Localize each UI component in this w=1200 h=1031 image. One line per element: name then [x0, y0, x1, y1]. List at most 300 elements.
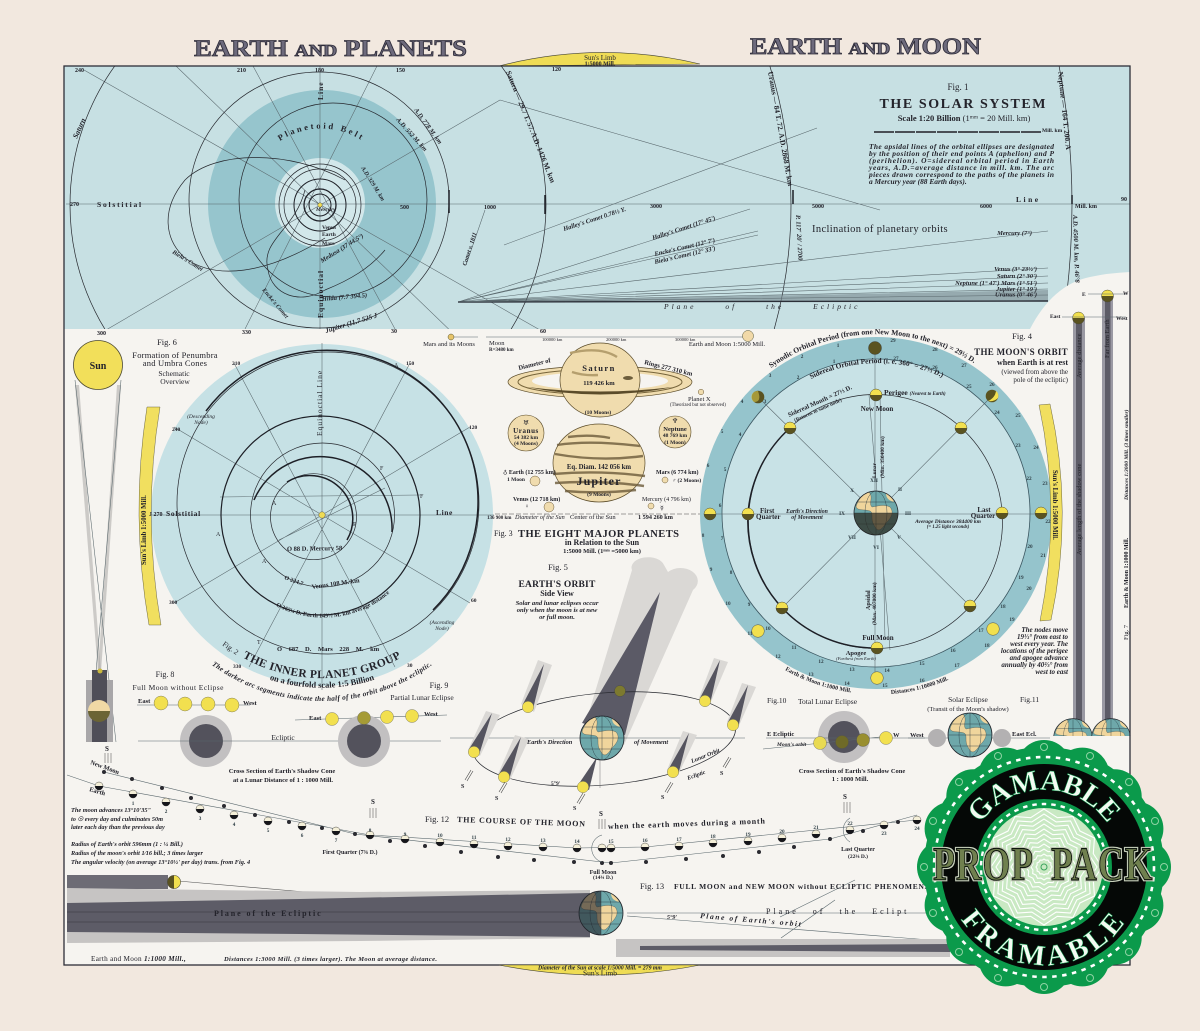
- day numbers: 22: [847, 821, 853, 827]
- heading: Earth and Planets: EARTH AND PLANETS: [194, 36, 467, 61]
- day numbers on ring: 1: [837, 343, 840, 349]
- day numbers on ring: 15: [882, 683, 888, 689]
- day numbers: [132, 801, 920, 845]
- map sheet: [64, 66, 1130, 965]
- planet: Neptune: ♆: [672, 417, 678, 425]
- day numbers: 13: [540, 838, 546, 844]
- planet and comet labels: A.D. 778 M. km: [412, 106, 443, 146]
- orbit labels: S: [573, 806, 577, 812]
- planet and comet labels: Plane of the Ecliptic: [663, 302, 860, 311]
- day numbers on ring: 25: [966, 384, 972, 390]
- labels: A: [394, 363, 399, 369]
- day numbers on ring: V: [897, 535, 901, 541]
- text block: nodes note: annually by 40⅔° from: [1001, 661, 1069, 669]
- planet and comet labels: Jupiter (1° 19'): [995, 286, 1037, 293]
- ring labels: (Max. 407000 km): [871, 582, 878, 625]
- day numbers on ring: 17: [954, 663, 960, 669]
- day numbers on ring: 5: [721, 429, 724, 435]
- panel: Fig 7 shadow columns: [1050, 290, 1130, 757]
- labels: (22⅜ D.): [848, 853, 868, 860]
- text block: moon course notes: Radius of the moon's orbit 1⁄16 bill.; 3 times larger: [70, 850, 203, 857]
- day numbers on ring: II: [898, 487, 902, 493]
- day numbers on ring: X: [850, 488, 854, 494]
- labels: S: [599, 810, 603, 818]
- caption: Fig 6: and Umbra Cones: [143, 358, 207, 368]
- day numbers on ring: 5: [724, 467, 727, 473]
- sheet frame: [64, 66, 1130, 965]
- sun centre line: 136 900 km: [487, 516, 512, 521]
- planet and comet labels: Jupiter (11.7 525 J: [323, 311, 379, 335]
- ring labels: (= 1.25 light seconds): [927, 525, 970, 530]
- day numbers: 12: [505, 837, 511, 843]
- planet: Jupiter: Jupiter: [576, 474, 622, 488]
- panel: Fig 10 total lunar eclipse: W: [893, 732, 900, 739]
- panel: Fig 9 partial lunar eclipse: West: [424, 711, 439, 718]
- planet: Neptune: (1 Moon): [664, 439, 686, 446]
- planet: Saturn: Diameter of: [518, 357, 552, 372]
- scale strip: Mars, Moon and Earth: Mars and its Moons: [423, 341, 475, 348]
- legend: the solar system title block: years, A.D.=average distance in mill. km. The arc: [868, 163, 1055, 172]
- panel: Fig 8 full moon without eclipse: Full Moon without Eclipse: [132, 683, 224, 692]
- planet and comet labels: Venus: [322, 225, 336, 231]
- day numbers on ring: XII: [870, 478, 878, 484]
- panel: Fig 7 shadow columns: East: [1050, 314, 1061, 320]
- labels: Solstitial: [166, 509, 201, 518]
- globe: [579, 891, 623, 935]
- planet: Uranus: 54 382 km: [514, 435, 538, 441]
- ring labels: Last: [977, 506, 991, 514]
- caption: Fig 6: Fig. 6: [157, 337, 177, 347]
- day numbers on ring: 2: [797, 375, 800, 381]
- planet and comet labels: Encke's Comet (12° 7'): [653, 237, 716, 258]
- legend: the solar system title block: Fig. 1: [947, 82, 969, 92]
- legend: the solar system title block: a Mercury year (88 Earth days).: [869, 177, 967, 186]
- labels: 120: [469, 425, 478, 431]
- planet: Uranus: [508, 415, 544, 451]
- ring labels: Earth's Direction: [785, 509, 828, 515]
- small planets: ♂ (2 Moons): [672, 477, 701, 484]
- sun's limb top: [499, 52, 700, 68]
- day numbers on ring: 8: [730, 570, 733, 576]
- caption: Fig 13: Fig. 13: [640, 881, 664, 891]
- planet: Neptune: [659, 416, 691, 448]
- planet: Jupiter: [553, 424, 645, 502]
- labels: A: [262, 559, 267, 565]
- text block: moon course notes: [70, 807, 250, 866]
- sun centre line: [487, 514, 710, 521]
- planet and comet labels: Neptune — 164 T. 200. A: [1056, 71, 1073, 151]
- ecliptic line with shadow cross-section caption: at a Lunar Distance of 1 : 1000 Mill.: [233, 777, 333, 784]
- day numbers on ring: 9: [748, 602, 751, 608]
- planet: Jupiter: Eq. Diam. 142 056 km: [567, 464, 631, 471]
- main shadow band: Plane of the Ecliptic: [214, 909, 323, 918]
- orbit labels: S: [720, 771, 724, 777]
- day numbers on ring: 27: [893, 356, 899, 362]
- caption: Fig 6: Formation of Penumbra: [132, 350, 218, 360]
- panel: Fig 9 partial lunar eclipse: East: [309, 715, 322, 722]
- planet and comet labels: Saturn: [71, 117, 87, 140]
- planet and comet labels: Uranus — 84 T. 72. A.D. 2868 M. km: [766, 71, 795, 188]
- day numbers on ring: 10: [765, 626, 771, 632]
- labels: Fig. 12: [425, 814, 449, 824]
- panel: Fig 9 partial lunar eclipse: Fig. 9: [430, 681, 448, 690]
- ecliptic line with shadow cross-section caption: [138, 733, 441, 784]
- planet: Uranus: Uranus: [513, 427, 539, 435]
- labels: Venus 108 M. km: [311, 577, 361, 591]
- labels: 30: [407, 663, 413, 669]
- text block: nodes note: and apogee advance: [1010, 654, 1068, 662]
- day numbers: 21: [813, 825, 819, 831]
- orbit labels: S: [661, 795, 665, 801]
- panel: Fig 10 total lunar eclipse: [763, 696, 925, 783]
- planet and comet labels: Encke's Comet: [260, 287, 289, 320]
- panel: Fig 7 shadow columns: West: [1116, 316, 1128, 322]
- caption: Fig 13: FULL MOON and NEW MOON without ECLIPTIC PHENOMENA: [674, 882, 931, 891]
- day numbers on ring: 6: [719, 503, 722, 509]
- panel: Fig 2 the inner planet group: [138, 343, 494, 702]
- caption: earth's orbit: Fig. 5: [548, 562, 568, 572]
- caption: earth's orbit: EARTH'S ORBIT: [519, 580, 596, 590]
- day numbers: 6: [301, 833, 304, 839]
- labels: O 365¼ D. Earth 149½ M. km average distance: [276, 592, 390, 618]
- panel: Fig 10 total lunar eclipse: Total Lunar Eclipse: [798, 697, 858, 706]
- day numbers on ring: 20: [1026, 586, 1032, 592]
- labels: The darker arc segments indicate the half of the orbit above the ecliptic.: [212, 662, 432, 702]
- planet and comet labels: Mercury: [315, 207, 336, 213]
- planet and comet labels: A.D. 4500 M. km, P. 46°8: [1071, 214, 1080, 284]
- planet and comet labels: A.D. 329 M. km: [359, 165, 385, 203]
- panel: Fig 4 the moon's orbit: [700, 329, 1069, 694]
- planet and comet labels: Line: [316, 81, 325, 100]
- day numbers on ring: 15: [919, 661, 925, 667]
- panel: Fig 7 shadow columns: Distances 1:3000 Mill. (3 times smaller): [1123, 409, 1130, 501]
- ring labels: (Returns to same node): [793, 396, 843, 424]
- planet and comet labels: Biela's Comet (12° 33'): [653, 245, 716, 266]
- panel: Fig 11 solar eclipse: Solar Eclipse: [948, 695, 989, 704]
- day numbers: 1: [132, 801, 135, 807]
- panel: Fig 7 shadow columns: Far from Earth: [1104, 319, 1111, 358]
- scale line: [91, 955, 437, 963]
- day numbers on ring: 25: [1015, 413, 1021, 419]
- caption: earth's orbit: or full moon.: [539, 614, 575, 621]
- text block: nodes note: locations of the perigee: [1001, 647, 1068, 655]
- title: eight major planets: THE EIGHT MAJOR PLANETS: [518, 529, 679, 540]
- planet: Saturn: Saturn: [582, 363, 616, 373]
- degree scale labels: 300: [97, 331, 106, 337]
- day numbers on ring: 27: [961, 363, 967, 369]
- labels: Line: [436, 508, 453, 517]
- day numbers on ring: III: [905, 511, 911, 517]
- degree scale labels: 60: [540, 329, 546, 335]
- sun's limb bottom: Diameter of the Sun at scale 1:5000 Mill. = 279 mm: [537, 966, 662, 972]
- labels: S: [105, 745, 109, 753]
- panel: Fig 10 total lunar eclipse: Cross Section of Earth's Shadow Cone: [799, 768, 905, 775]
- day numbers on ring: 3: [769, 373, 772, 379]
- labels: Full Moon: [590, 870, 617, 876]
- sun's limb right: [1039, 404, 1062, 621]
- panel: Fig 7 shadow columns: Fig. 7: [1123, 624, 1130, 640]
- day numbers on ring: 22: [1026, 476, 1032, 482]
- labels: O 687 D. Mars 228 M. km: [277, 646, 380, 653]
- day numbers on ring: 26: [932, 365, 938, 371]
- planet and comet labels: Mars: [322, 241, 335, 247]
- planet and comet labels: Earth: [322, 232, 336, 238]
- planet and comet labels: P. 117' 20' / 2700: [794, 215, 803, 261]
- caption: earth's orbit: Solar and lunar eclipses occur: [516, 600, 599, 607]
- orbit labels: [461, 739, 731, 812]
- day numbers: 5: [267, 828, 270, 834]
- day numbers on ring: 23: [1042, 481, 1048, 487]
- legend: the solar system title block: THE SOLAR SYSTEM: [880, 97, 1046, 112]
- panel: Fig 11 solar eclipse: [908, 695, 1050, 757]
- ecliptic line with shadow cross-section caption: Ecliptic: [271, 733, 295, 742]
- ring labels: Apsidal: [866, 590, 872, 610]
- scale strip: Mars, Moon and Earth: Earth and Moon 1:5000 Mill.: [689, 341, 766, 348]
- degree scale labels: Mill. km: [1075, 204, 1097, 210]
- title: the moon's orbit: (viewed from above the: [1001, 368, 1068, 376]
- ring labels: Quarter: [971, 512, 995, 520]
- text block: nodes note: [1001, 626, 1069, 676]
- ring labels: New Moon: [861, 405, 893, 413]
- planet and comet labels: Mercury (7°): [996, 230, 1032, 237]
- day numbers: 7: [335, 838, 338, 844]
- labels: J 270: [149, 512, 162, 518]
- small planets: Venus (12 718 km): [513, 496, 560, 503]
- globes under columns: [1053, 718, 1131, 736]
- badge: gamable prop pack framable: [917, 740, 1171, 994]
- day numbers: 11: [472, 835, 477, 841]
- planetoid belt: [208, 90, 436, 318]
- orbit labels: 5°9': [551, 780, 561, 787]
- degree scale labels: 180: [315, 68, 324, 74]
- labels: P: [353, 522, 357, 528]
- labels: Node): [434, 625, 449, 632]
- ring labels: First: [760, 507, 775, 515]
- degree scale labels: 150: [396, 68, 405, 74]
- panel: Fig 10 total lunar eclipse: Fig.10: [767, 696, 787, 705]
- lower right band: [616, 939, 950, 957]
- planet and comet labels: Medusa (37 44.5°): [319, 233, 365, 265]
- caption: earth's orbit: [516, 562, 599, 621]
- planet: Saturn: Rings 277 310 km: [644, 359, 694, 378]
- panel: Fig 7 shadow columns: Average distance: [1076, 333, 1083, 378]
- panel: Fig 13 full moon and new moon: [67, 875, 950, 963]
- day numbers on ring: 24: [994, 410, 1000, 416]
- day numbers on ring: 14: [844, 681, 850, 687]
- caption: Fig 6: Overview: [160, 377, 190, 386]
- day numbers on ring: 11: [748, 631, 753, 637]
- title: eight major planets: [494, 529, 679, 555]
- planet and comet labels: [71, 69, 1080, 335]
- labels: Earth: [88, 786, 106, 798]
- text block: moon course notes: The angular velocity (on average 13°10½' per day) trans. from Fig. 4: [71, 859, 250, 866]
- degree scale labels: 1000: [484, 205, 496, 211]
- icon: sun: [74, 340, 122, 390]
- labels: S: [371, 798, 375, 806]
- panel: Fig 8 full moon without eclipse: [132, 670, 258, 767]
- planet and comet labels: Hilda (7.7 394.5): [321, 292, 368, 303]
- labels: Last Quarter: [841, 847, 875, 853]
- sun centre line: 1 594 260 km: [638, 514, 674, 521]
- panel: Fig 7 shadow columns: E: [1082, 292, 1086, 298]
- day numbers on ring: 21: [1040, 553, 1046, 559]
- ring labels: Quarter: [756, 513, 780, 521]
- day numbers on ring: 23: [1015, 443, 1021, 449]
- labels: New Moon: [89, 759, 120, 776]
- legend: the solar system title block: Mill. km: [1042, 128, 1063, 134]
- scroll ornaments: [920, 744, 1168, 990]
- labels: when the earth moves during a month: [608, 817, 766, 831]
- panel: Fig 9 partial lunar eclipse: Partial Lunar Eclipse: [390, 693, 454, 702]
- scale strip: Mars, Moon and Earth: R=3480 km: [489, 348, 514, 353]
- badge text: framable: FRAMABLE: [960, 908, 1124, 966]
- scale strip: Mars, Moon and Earth: 300000 km: [675, 337, 696, 342]
- panel: Fig 10 total lunar eclipse: 1 : 1000 Mill.: [832, 776, 869, 783]
- panel: Fig 12 the course of the moon: [67, 745, 921, 881]
- planet: Uranus: ♅: [523, 419, 529, 427]
- day numbers: 4: [233, 822, 236, 828]
- labels: S: [843, 793, 847, 801]
- orbit labels: Earth's Direction: [526, 739, 573, 746]
- small planets: 1 Moon: [507, 477, 525, 483]
- day numbers: 9: [404, 832, 407, 838]
- labels: First Quarter (7⅜ D.): [322, 849, 378, 856]
- ring labels: Full Moon: [862, 634, 894, 642]
- day numbers on ring: 22: [1045, 519, 1051, 525]
- degree scale labels: [70, 67, 1127, 337]
- planet and comet labels: A.D. 552 M. km: [394, 116, 428, 153]
- text block: moon course notes: to ☉ every day and culminates 50m: [71, 816, 163, 823]
- labels: Node): [193, 419, 208, 426]
- labels: O 88 D. Mercury 58: [287, 545, 343, 553]
- panel: Fig 7 shadow columns: W: [1123, 291, 1129, 297]
- panel: Fig 11 solar eclipse: Fig.11: [1020, 695, 1039, 704]
- panel: Fig 6 penumbra and umbra cones: [74, 337, 218, 742]
- right plane lines: Plane of Earth's orbit: [700, 911, 803, 929]
- labels: F: [380, 466, 384, 472]
- title: the moon's orbit: pole of the ecliptic): [1013, 376, 1069, 384]
- day numbers: 18: [710, 834, 716, 840]
- sun centre line: Center of the Sun: [570, 514, 616, 521]
- day numbers on ring: 19: [1018, 575, 1024, 581]
- planet and comet labels: Line: [1016, 195, 1041, 204]
- icon: sun: Sun: [90, 361, 107, 372]
- labels: (Ascending: [430, 619, 455, 626]
- legend: the solar system title block: [868, 82, 1063, 186]
- legend: the solar system title block: pieces drawn correspond to the paths of the planets in: [868, 170, 1054, 179]
- text block: nodes note: 19⅓° from east to: [1017, 633, 1068, 641]
- main shadow band: [67, 888, 590, 943]
- day numbers on ring: 4: [741, 399, 744, 405]
- planet and comet labels: Halley's Comet 0.78½ Y.: [562, 206, 627, 233]
- planet and comet labels: Equinoctial: [316, 270, 325, 318]
- sun's limb bottom: Sun's Limb: [583, 968, 617, 978]
- planet and comet labels: Biela's Comet: [170, 249, 204, 273]
- panel: Fig 8 full moon without eclipse: Fig. 8: [156, 670, 174, 679]
- caption: Fig 6: [132, 337, 218, 386]
- legend: the solar system title block: Scale 1:20 Billion (1ᵐᵐ = 20 Mill. km): [898, 113, 1030, 123]
- ecliptic line with shadow cross-section caption: Cross Section of Earth's Shadow Cone: [229, 768, 335, 775]
- labels: 330: [233, 664, 242, 670]
- planet and comet labels: Comet v. 1811: [462, 232, 479, 267]
- day numbers on ring: VI: [873, 545, 879, 551]
- planet: Uranus: (4 Moons): [514, 440, 538, 447]
- labels: [88, 745, 875, 881]
- degree scale labels: 330: [242, 330, 251, 336]
- small planets: ♁ Earth (12 755 km): [503, 469, 556, 476]
- day numbers on ring: 11: [792, 645, 797, 651]
- panel: Fig 9 partial lunar eclipse: [295, 681, 454, 767]
- labels: Fig. 2: [221, 639, 241, 657]
- panel: Fig 10 total lunar eclipse: E Ecliptic: [767, 731, 794, 738]
- orbit labels: S: [461, 784, 465, 790]
- day numbers: 19: [745, 832, 751, 838]
- ring labels: Sidereal Orbital Period (i. e. 360° = 27⅓ D.): [810, 358, 944, 379]
- planet and comet labels: Saturn — 29.7 T. 57. A.D. 1426 M. km: [504, 69, 558, 185]
- caption: earth's orbit: Side View: [540, 589, 574, 598]
- day numbers on ring: 1: [833, 359, 836, 365]
- ring labels: Earth & Moon 1:1000 Mill.: [785, 666, 851, 692]
- panel: Fig 7 shadow columns: Average length of the shadow cone: [1076, 463, 1083, 555]
- ring labels: Perigee (Nearest to Earth): [884, 388, 946, 397]
- title: eight major planets: Fig. 3: [494, 529, 513, 538]
- labels: O 224.7: [283, 575, 304, 588]
- panel: Fig 8 full moon without eclipse: West: [243, 700, 258, 707]
- orbit labels: S: [495, 796, 499, 802]
- earth positions: [95, 782, 921, 852]
- day numbers: 24: [914, 826, 920, 832]
- labels: A: [272, 501, 277, 507]
- day numbers on ring: 14: [884, 668, 890, 674]
- moon positions: [102, 770, 900, 865]
- planet and comet labels: Solstitial: [97, 200, 143, 209]
- labels: THE COURSE OF THE MOON: [457, 815, 585, 828]
- sun's limb top: 1:5000 Mill.: [585, 62, 616, 68]
- labels: Equinoctial Line: [315, 370, 324, 436]
- planet and comet labels: Venus (3° 23½'): [994, 266, 1037, 273]
- day numbers on ring: 29: [890, 338, 896, 344]
- sun's limb bottom: [499, 965, 700, 978]
- ring labels: Sidereal Month = 27⅓ D.: [787, 384, 853, 419]
- labels: F: [420, 494, 424, 500]
- planet: Neptune: 48 769 km: [663, 433, 687, 439]
- day numbers on ring: 6: [707, 463, 710, 469]
- labels: 150: [406, 361, 414, 367]
- panel: Fig 8 full moon without eclipse: East: [138, 698, 151, 705]
- panel: Fig 5 earth's orbit: [450, 557, 756, 812]
- day numbers on ring: 24: [1033, 445, 1039, 451]
- planet and comet labels: Uranus (0° 46'): [995, 292, 1037, 298]
- scalloped green seal: [917, 740, 1171, 994]
- day numbers on ring: 19: [1009, 617, 1015, 623]
- day numbers on ring: 12: [818, 659, 824, 665]
- day numbers on ring: 8: [702, 533, 705, 539]
- ring labels: Distances 1:10000 Mill.: [890, 676, 948, 694]
- degree scale labels: 5000: [812, 204, 824, 210]
- upper moon shadow band: [67, 875, 363, 897]
- ring labels: (Farthest from Earth): [836, 656, 876, 661]
- labels: 210: [232, 361, 240, 367]
- labels: 300: [169, 600, 178, 606]
- degree scale labels: 6000: [980, 204, 992, 210]
- caption: earth's orbit: only when the moon is at new: [517, 607, 598, 614]
- labels: A: [216, 532, 221, 538]
- small planets: Mercury (4 796 km): [642, 496, 691, 503]
- ring labels: Apogee: [846, 650, 866, 657]
- planet: Saturn: [508, 343, 694, 417]
- small planets: ☿: [660, 505, 664, 512]
- degree scale labels: 30: [391, 329, 397, 335]
